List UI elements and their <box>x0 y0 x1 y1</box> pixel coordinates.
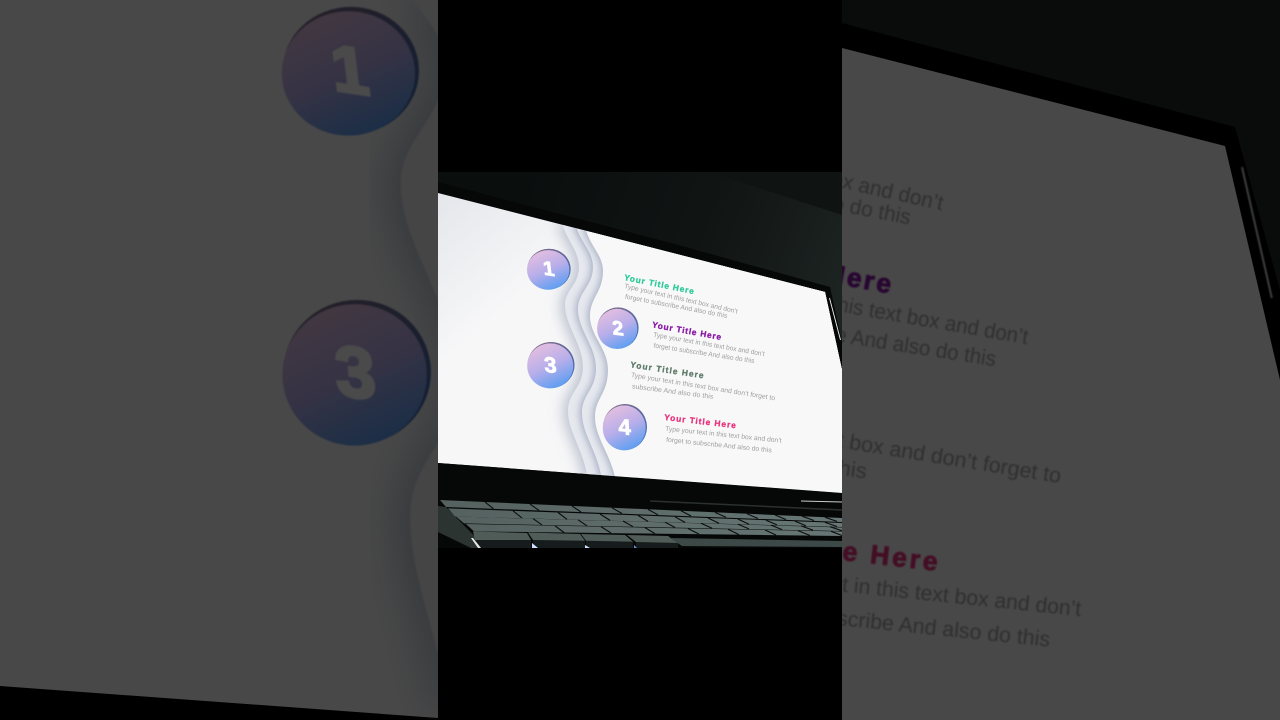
step 3 text: subscribe And also do this <box>631 383 714 401</box>
panel: blurred right close-up: forget to subscribe And also do this <box>678 298 998 371</box>
panel: blurred left close-up <box>0 0 480 720</box>
step 4 text: Type your text in this text box and don’t <box>665 426 782 445</box>
keyboard <box>440 500 843 548</box>
laptop bezel <box>544 210 842 368</box>
wave layers <box>554 223 842 493</box>
panel: blurred left close-up: 1 <box>327 31 373 110</box>
step 1 text: Type your text in this text box and don’t <box>624 283 738 315</box>
panel: central laptop photo <box>438 172 842 548</box>
step 3 text <box>630 359 776 402</box>
laptop screen <box>438 193 842 493</box>
key row 5 tops <box>473 532 842 547</box>
panel: blurred right close-up: Your Title Here <box>672 230 894 299</box>
step 3 text: Type your text in this text box and don’t forget to <box>630 372 776 402</box>
panel: blurred right close-up: Type your text in this text box and don’t forget to <box>607 391 1063 488</box>
step 3 badge <box>527 342 574 388</box>
step 3 badge: 3 <box>543 352 558 378</box>
key row 1 <box>440 500 842 522</box>
step 2 text: Type your text in this text box and don’t <box>653 332 765 358</box>
step 2 badge: 2 <box>611 317 625 341</box>
laptop hinge and deck <box>438 463 842 548</box>
step 4 text: Your Title Here <box>664 412 737 430</box>
bezel highlight line <box>830 298 840 340</box>
step 1 badge <box>527 249 571 290</box>
step 1 text: Your Title Here <box>623 272 695 296</box>
step 2 badge <box>597 307 639 349</box>
key row 2 <box>448 508 842 527</box>
key glints <box>471 538 637 548</box>
step 2 text <box>651 319 765 365</box>
step 4 badge <box>603 404 647 450</box>
step 1 badge: 1 <box>542 258 556 281</box>
key row 3 <box>456 516 842 531</box>
panel: blurred right close-up: forget to subscribe And also do this <box>588 145 913 229</box>
panel: blurred left close-up: 3 <box>332 330 378 415</box>
step 1 text: forget to subscribe And also do this <box>624 294 728 320</box>
panel: blurred right close-up: Type your text in this text box and don’t <box>585 112 946 215</box>
key row 5 front faces <box>475 540 678 548</box>
panel: blurred right close-up: Your Title Here <box>711 521 939 577</box>
panel: blurred right close-up: forget to subscribe And also do this <box>718 594 1051 652</box>
step 4 text <box>664 412 782 454</box>
step 4 text: forget to subscribe And also do this <box>666 437 773 454</box>
panel: blurred right close-up: subscribe And also do this <box>610 426 868 483</box>
key row 4 <box>466 524 843 536</box>
step 2 text: Your Title Here <box>651 319 722 342</box>
step 1 text <box>623 272 738 320</box>
panel: blurred right close-up: Type your text in this text box and don’t <box>715 559 1083 621</box>
step 2 text: forget to subscribe And also do this <box>653 343 755 365</box>
panel: blurred right close-up: Type your text in this text box and don’t <box>677 265 1030 349</box>
step 3 text: Your Title Here <box>630 359 705 380</box>
panel: blurred right close-up <box>842 0 1280 720</box>
step 4 badge: 4 <box>618 414 632 440</box>
